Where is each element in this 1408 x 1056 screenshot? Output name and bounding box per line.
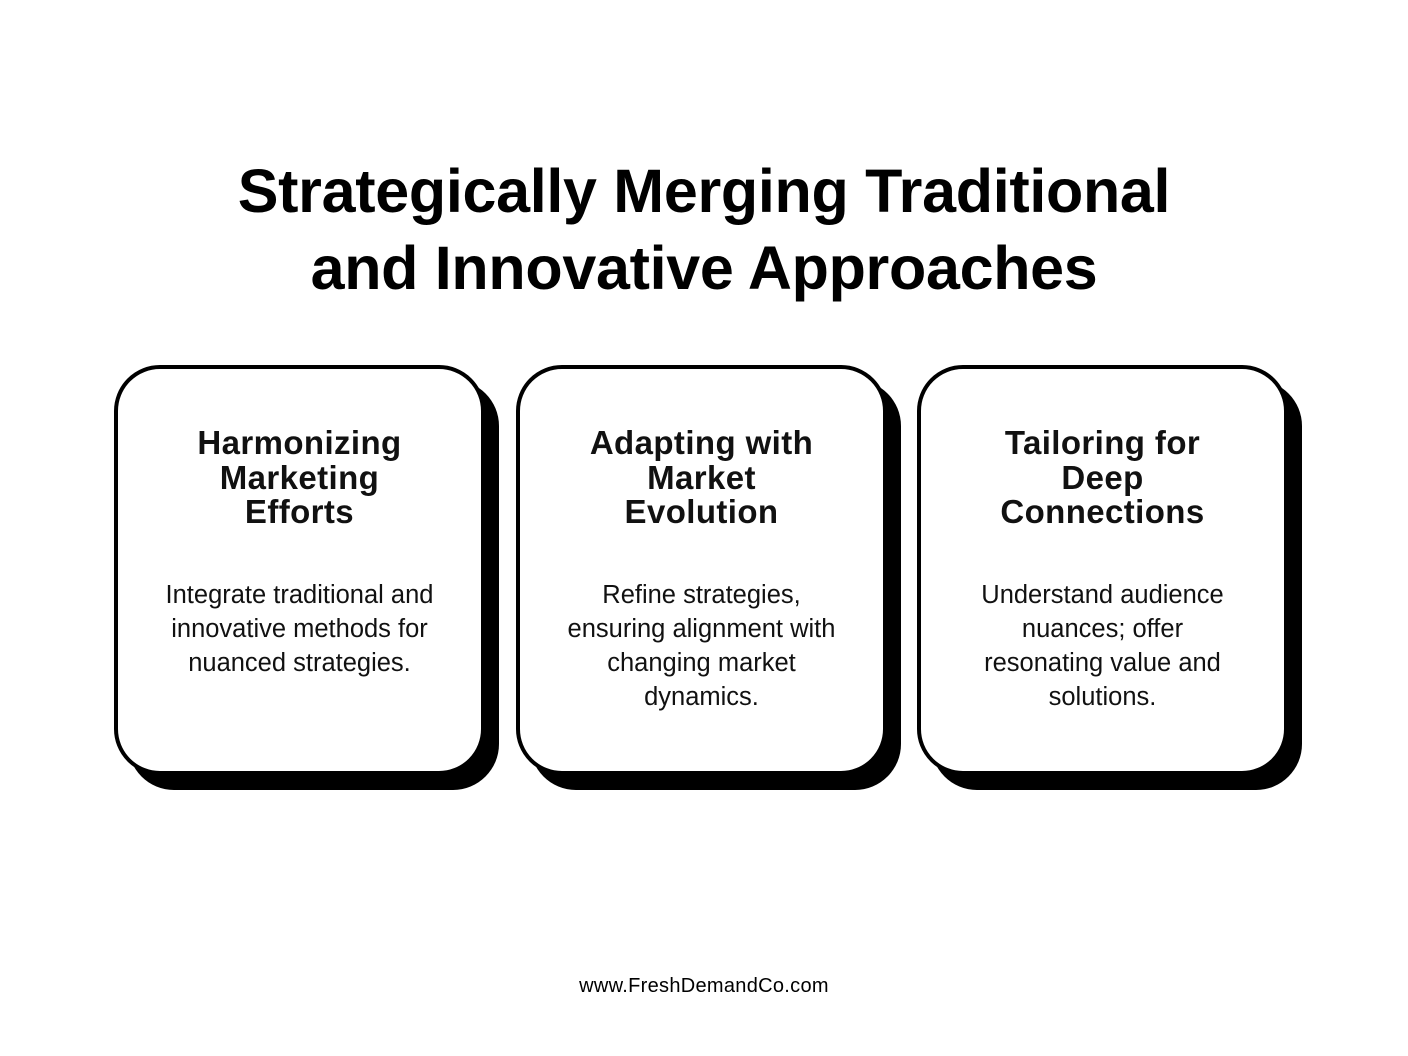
heading: harmonizing: Marketing bbox=[220, 458, 379, 496]
text: harmonizing: innovative methods for bbox=[171, 615, 428, 643]
heading: adapting: Adapting with bbox=[590, 424, 813, 461]
footer url: www.FreshDemandCo.com bbox=[579, 975, 829, 997]
text: adapting bbox=[568, 581, 835, 711]
panel: harmonizing bbox=[114, 365, 499, 790]
heading: harmonizing: Harmonizing bbox=[197, 424, 402, 461]
heading: tailoring bbox=[1000, 424, 1205, 530]
text: tailoring: Understand audience bbox=[981, 581, 1224, 609]
title: Strategically Merging Traditional bbox=[238, 157, 1170, 225]
heading: tailoring: Tailoring for bbox=[1005, 424, 1200, 461]
heading: adapting: Market bbox=[647, 458, 756, 496]
text: tailoring: resonating value and bbox=[984, 649, 1221, 677]
text: adapting: dynamics. bbox=[644, 683, 759, 711]
text: adapting: changing market bbox=[607, 649, 796, 677]
text: harmonizing: nuanced strategies. bbox=[188, 649, 411, 677]
text: tailoring: nuances; offer bbox=[1022, 615, 1183, 643]
heading: harmonizing bbox=[197, 424, 402, 530]
heading: harmonizing: Efforts bbox=[245, 493, 354, 530]
text: tailoring bbox=[981, 581, 1224, 711]
heading: adapting: Evolution bbox=[625, 493, 778, 530]
heading: tailoring: Deep bbox=[1061, 458, 1144, 496]
title: and Innovative Approaches bbox=[311, 234, 1097, 302]
text: adapting: ensuring alignment with bbox=[568, 615, 835, 643]
title bbox=[238, 157, 1170, 302]
heading: adapting bbox=[590, 424, 813, 530]
text: harmonizing bbox=[166, 581, 433, 677]
heading: tailoring: Connections bbox=[1000, 493, 1205, 530]
text: harmonizing: Integrate traditional and bbox=[166, 581, 433, 609]
text: tailoring: solutions. bbox=[1049, 683, 1156, 711]
text: adapting: Refine strategies, bbox=[602, 581, 801, 609]
panel: tailoring bbox=[917, 365, 1302, 790]
panel: adapting bbox=[516, 365, 901, 790]
